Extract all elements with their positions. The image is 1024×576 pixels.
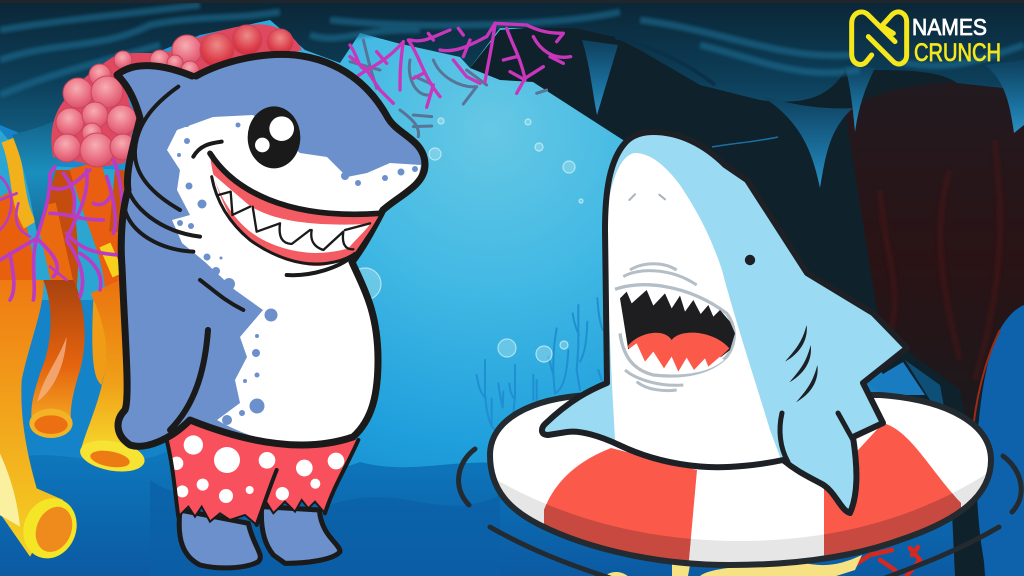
logo wordmark NAMES: NAMES <box>912 14 987 40</box>
body fill <box>542 132 907 513</box>
red coral bottom <box>850 547 920 576</box>
purple branching coral top <box>350 23 571 137</box>
body outline <box>117 54 425 446</box>
swim shorts <box>167 420 358 525</box>
ripple lines <box>459 449 1021 576</box>
left stalactite <box>12 108 72 237</box>
arm line <box>170 330 208 430</box>
gill lines and smile <box>125 87 352 310</box>
left shark <box>117 54 425 568</box>
yellow coral bottom <box>603 555 862 576</box>
logo icon <box>852 12 907 64</box>
dark cave right side <box>470 25 1024 576</box>
ring outline <box>490 395 991 565</box>
face details, mouth and teeth <box>615 194 735 391</box>
body and head <box>117 54 425 446</box>
logo wordmark CRUNCH: CRUNCH <box>914 39 1001 67</box>
eye <box>745 255 755 265</box>
purple branching coral left <box>0 160 123 300</box>
white belly and jaw <box>167 115 421 445</box>
seaweed silhouettes <box>477 298 603 430</box>
logo: Names Crunch <box>852 12 1001 67</box>
tube: orange yellow <box>78 280 147 476</box>
orange tube mass behind coral <box>0 130 125 300</box>
body outline <box>542 132 907 513</box>
eye <box>248 106 300 168</box>
pink brain coral <box>51 24 302 167</box>
red stripes <box>544 448 697 570</box>
white belly <box>605 153 785 470</box>
mouth and teeth <box>210 153 380 266</box>
white shadow band <box>498 474 986 562</box>
ring white base <box>493 398 988 541</box>
red shadow band <box>544 493 961 560</box>
tube corals <box>0 280 147 567</box>
legs <box>179 507 340 568</box>
blue spots <box>177 122 418 425</box>
right shark <box>542 132 907 513</box>
tube: back orange <box>92 300 107 385</box>
tube: large yellow <box>0 280 86 567</box>
grey branches <box>350 40 547 137</box>
tube: brown orange <box>29 280 85 438</box>
bubbles <box>349 118 583 362</box>
life ring <box>480 390 1000 570</box>
gills <box>785 325 818 402</box>
fin lines <box>780 413 853 462</box>
cave ceiling with stalactites <box>0 0 1024 188</box>
